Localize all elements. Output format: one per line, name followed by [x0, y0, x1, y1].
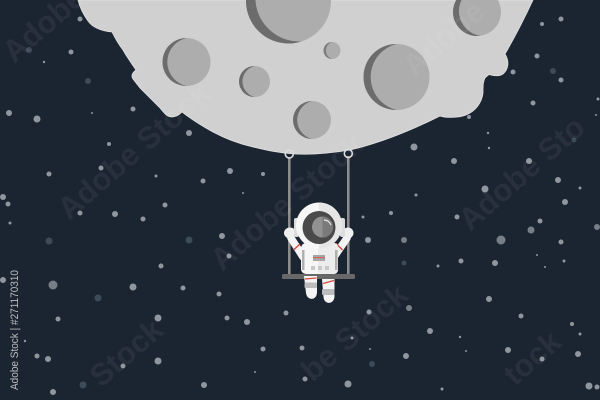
astronaut body: [301, 243, 338, 274]
watermark: Adobe Stock repeated: Stock: [83, 311, 170, 394]
watermark: Adobe Stock repeated: Adobe Stock: [204, 126, 370, 277]
swing ropes: [288, 156, 350, 275]
astronaut legs: [304, 276, 334, 303]
watermark: Adobe Stock repeated: Adobe Stock: [51, 75, 217, 226]
crater top right: [450, 0, 501, 39]
astronaut helmet: [294, 202, 345, 248]
side credit text: Adobe Stock | #271170310: [9, 270, 21, 390]
watermark: Adobe Stock repeated: Adobe Sto: [452, 109, 592, 237]
astronaut: [284, 202, 354, 303]
swing rings: [285, 150, 352, 158]
crater bottom: [293, 101, 331, 139]
watermark: Adobe Stock repeated: tock: [497, 323, 568, 392]
crater large right: [364, 44, 430, 110]
crater left: [162, 38, 210, 86]
moon with craters: [78, 0, 533, 154]
crater small top: [324, 42, 340, 59]
swing: [282, 150, 355, 279]
swing seat: [282, 274, 355, 279]
crater top centre: [235, 0, 331, 55]
moon surface: [78, 0, 533, 154]
crater small left: [239, 66, 270, 97]
watermark: Adobe Stock repeated: be Stock: [294, 276, 415, 388]
astronaut arms: [284, 228, 354, 257]
